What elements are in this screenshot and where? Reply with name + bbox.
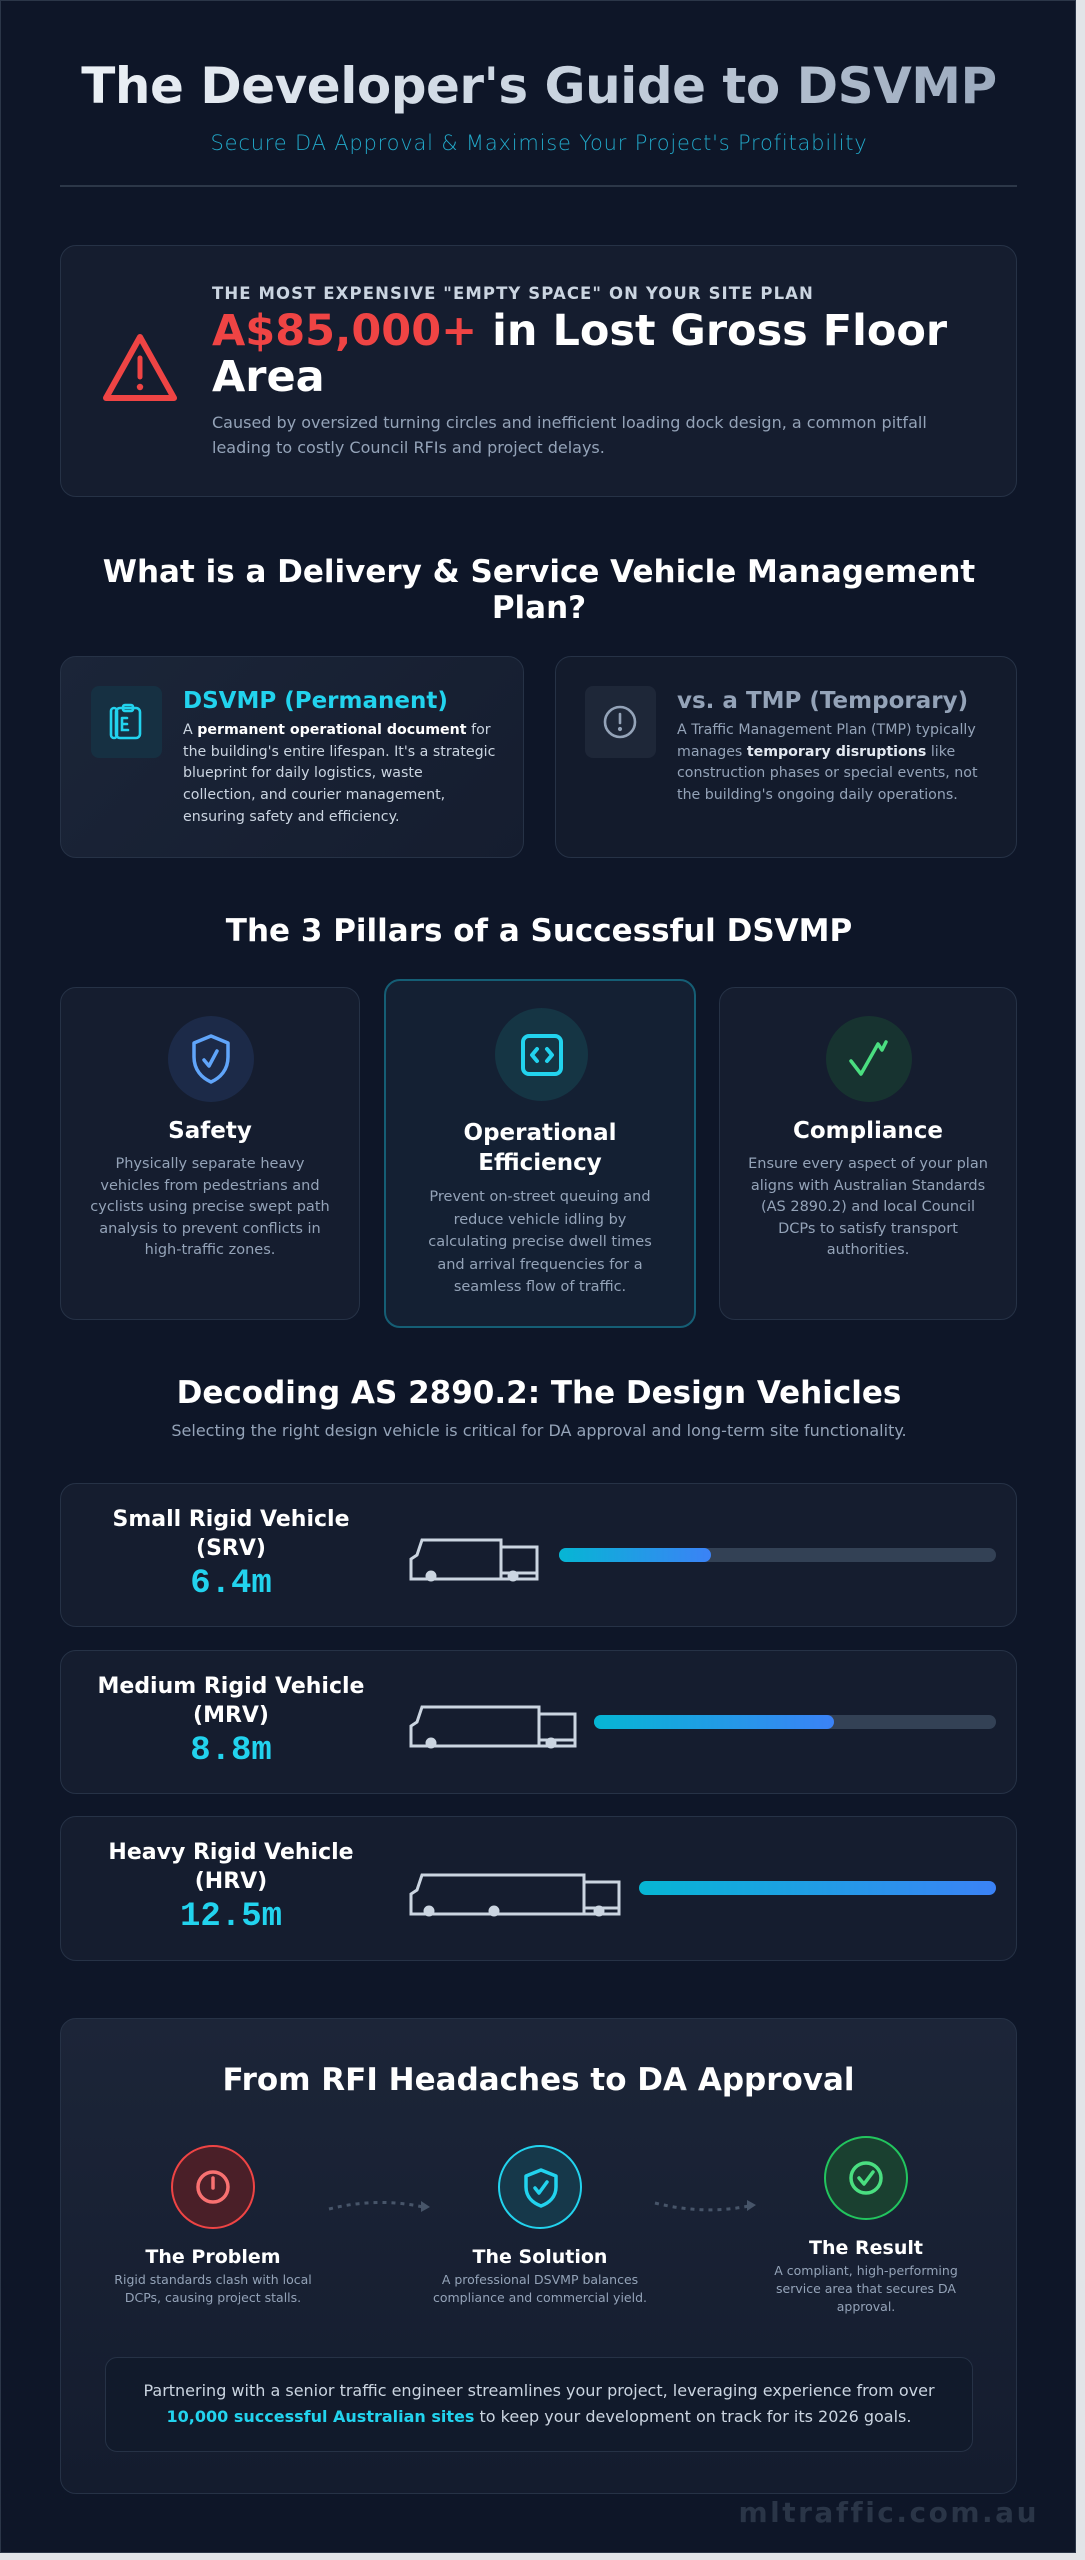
title xyxy=(464,1120,616,1176)
step: solution xyxy=(433,2145,647,2305)
bar xyxy=(594,1715,996,1729)
label xyxy=(98,1674,364,1728)
label: (SRV) xyxy=(196,1536,266,1561)
panel: lost GFA alert xyxy=(60,245,1017,497)
bar xyxy=(559,1548,996,1562)
label: Medium Rigid Vehicle xyxy=(98,1674,364,1699)
label xyxy=(112,1507,349,1561)
title: The Developer's Guide to DSVMP xyxy=(81,57,997,115)
headline stat: A$85,000+ in Lost Gross Floor Area xyxy=(212,306,947,402)
icon: problem xyxy=(171,2145,255,2229)
title: Operational xyxy=(464,1120,616,1146)
description: Caused by oversized turning circles and inefficient loading dock design, a common pitfall leading to costly Council RFIs and project delays. xyxy=(212,413,927,457)
title: Efficiency xyxy=(478,1150,602,1176)
value: 6.4m xyxy=(190,1565,272,1603)
text: A professional DSVMP balances compliance and commercial yield. xyxy=(433,2272,647,2305)
icon: truck xyxy=(410,1538,538,1582)
text: A Traffic Management Plan (TMP) typically manages temporary disruptions like construction phases or special events, not the building's ongoing daily operations. xyxy=(677,722,978,803)
step: result xyxy=(774,2136,958,2314)
icon: clipboard xyxy=(91,686,162,758)
heading: From RFI Headaches to DA Approval xyxy=(222,2062,855,2098)
arrow 2 xyxy=(654,2200,756,2212)
arrow 1 xyxy=(328,2201,430,2212)
step: problem xyxy=(114,2145,312,2305)
heading: 3 pillars: The 3 Pillars of a Successful DSVMP xyxy=(226,913,852,949)
title: Safety xyxy=(168,1118,252,1144)
title: The Problem xyxy=(145,2246,281,2268)
label: Heavy Rigid Vehicle xyxy=(108,1840,354,1865)
callout xyxy=(105,2357,973,2452)
value: 8.8m xyxy=(190,1732,272,1770)
value: 12.5m xyxy=(180,1898,282,1936)
panel: safety pillar xyxy=(60,987,360,1320)
icon: truck xyxy=(410,1874,620,1916)
title: Compliance xyxy=(793,1118,943,1144)
panel: compliance pillar xyxy=(719,987,1017,1320)
title: The Result xyxy=(809,2237,923,2259)
icon: warning triangle xyxy=(103,334,177,401)
panel: DSVMP permanent xyxy=(60,656,524,858)
icon: solution shield xyxy=(498,2145,582,2229)
title: TMP: vs. a TMP (Temporary) xyxy=(677,688,968,714)
label: Small Rigid Vehicle xyxy=(112,1507,349,1532)
icon: check xyxy=(826,1016,912,1102)
icon: code box xyxy=(495,1008,588,1101)
bar xyxy=(639,1881,996,1895)
icon: shield xyxy=(168,1016,254,1102)
row: SRV xyxy=(60,1483,1017,1627)
label: (MRV) xyxy=(193,1703,269,1728)
heading: decoding AS 2890.2: Decoding AS 2890.2: The Design Vehicles xyxy=(177,1375,901,1411)
title: DSVMP permanent: DSVMP (Permanent) xyxy=(183,688,448,714)
panel: TMP temporary xyxy=(555,656,1017,858)
heading: what is DSVMP: What is a Delivery & Service Vehicle Management Plan? xyxy=(103,554,975,626)
text: Physically separate heavy vehicles from pedestrians and cyclists using precise swept path analysis to prevent conflicts in high-traffic zones. xyxy=(90,1156,330,1258)
watermark: mltraffic.com.au xyxy=(738,2496,1039,2529)
label xyxy=(108,1840,354,1894)
icon: truck xyxy=(410,1706,576,1748)
label: (HRV) xyxy=(195,1869,267,1894)
icon: info circle xyxy=(585,686,656,758)
text: A compliant, high-performing service area that secures DA approval. xyxy=(774,2263,958,2314)
kicker text: THE MOST EXPENSIVE "EMPTY SPACE" ON YOUR SITE PLAN xyxy=(212,284,814,303)
text: Rigid standards clash with local DCPs, causing project stalls. xyxy=(114,2272,312,2305)
text: Prevent on-street queuing and reduce vehicle idling by calculating precise dwell times and arrival frequencies for a seamless flow of traffic. xyxy=(428,1189,652,1295)
title: The Solution xyxy=(473,2246,607,2268)
icon: result check xyxy=(824,2136,908,2220)
text: A permanent operational document for the building's entire lifespan. It's a strategic blueprint for daily logistics, waste collection, and courier management, ensuring safety and efficiency. xyxy=(183,722,495,825)
subtitle: Secure DA Approval & Maximise Your Project's Profitability xyxy=(210,131,867,155)
row: HRV xyxy=(60,1816,1017,1961)
text: Ensure every aspect of your plan aligns with Australian Standards (AS 2890.2) and local Council DCPs to satisfy transport authorities. xyxy=(748,1156,988,1258)
callout: Partnering with a senior traffic engineer streamlines your project, leveraging experience from over 10,000 successful Australian sites to keep your development on track for its 2026 goals. xyxy=(143,2381,935,2426)
row: MRV xyxy=(60,1650,1017,1794)
subheading: Selecting the right design vehicle is critical for DA approval and long-term site functionality. xyxy=(171,1421,907,1440)
panel: RFI to DA approval xyxy=(60,2018,1017,2494)
panel: efficiency pillar xyxy=(384,979,696,1328)
